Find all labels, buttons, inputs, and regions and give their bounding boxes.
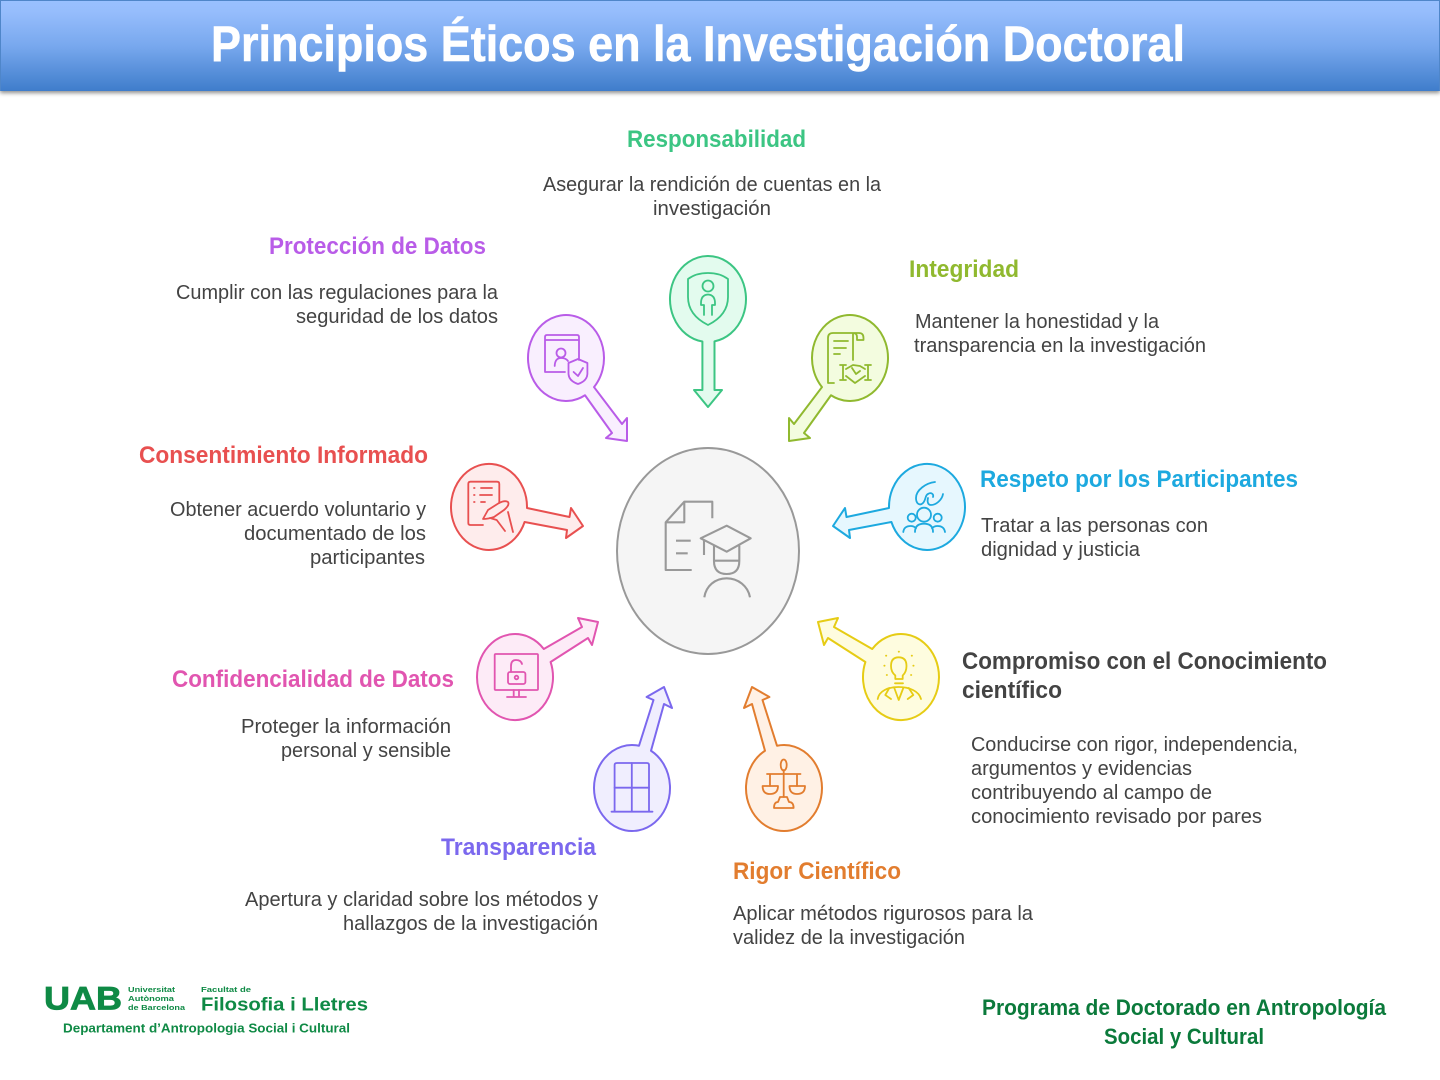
header banner (0, 0, 1440, 91)
description: Protección de Datos: Cumplir con las regulaciones para la (176, 282, 499, 304)
description: Responsabilidad: investigación (653, 198, 771, 220)
icon: scroll and handshake (828, 333, 871, 383)
description: Protección de Datos: seguridad de los datos (296, 306, 498, 328)
description: Confidencialidad de Datos (241, 716, 451, 762)
panel: Consentimiento Informado (139, 442, 583, 569)
arrow node: Consentimiento Informado (451, 464, 583, 550)
description: Rigor Científico: validez de la investigación (733, 927, 965, 949)
heading: Respeto por los Participantes: Respeto por los Participantes (980, 466, 1298, 493)
heading: Integridad: Integridad (909, 256, 1019, 283)
arrow node: Compromiso con el Conocimiento científico (818, 618, 939, 720)
heading: Compromiso con el Conocimiento científico: Compromiso con el Conocimiento (962, 648, 1327, 675)
description: Respeto por los Participantes: Tratar a las personas con (981, 515, 1208, 537)
description: Transparencia: hallazgos de la investigación (343, 913, 598, 935)
description: Compromiso con el Conocimiento científico: Conducirse con rigor, independencia, (971, 734, 1298, 756)
logo: UAB Filosofia i Lletres: Autònoma (128, 994, 175, 1003)
icon: shield with person (688, 273, 728, 325)
description: Compromiso con el Conocimiento científico (971, 734, 1298, 828)
arrow node: Integridad (789, 315, 888, 441)
description: Protección de Datos (176, 282, 499, 328)
arrow node: Confidencialidad de Datos (477, 618, 598, 720)
heading: Protección de Datos: Protección de Datos (269, 233, 486, 260)
description: Confidencialidad de Datos: Proteger la información (241, 716, 451, 738)
description: Rigor Científico: Aplicar métodos rigurosos para la (733, 903, 1034, 925)
icon: people with care symbol (903, 482, 945, 532)
logo: UAB Filosofia i Lletres: UAB (44, 980, 122, 1016)
description: Compromiso con el Conocimiento científico: contribuyendo al campo de (971, 782, 1212, 804)
panel: Integridad (789, 256, 1206, 441)
logo: UAB Filosofia i Lletres: de Barcelona (128, 1003, 186, 1012)
heading: Compromiso con el Conocimiento científico: científico (962, 677, 1062, 704)
heading: Transparencia: Transparencia (441, 834, 596, 861)
logo: UAB Filosofia i Lletres: Departament d’Antropologia Social i Cultural (63, 1022, 350, 1036)
panel: Responsabilidad (543, 126, 882, 407)
icon: window (612, 763, 652, 812)
program name: Social y Cultural (1104, 1024, 1264, 1049)
panel: Transparencia (245, 687, 672, 935)
description: Integridad: Mantener la honestidad y la (915, 311, 1160, 333)
heading: Confidencialidad de Datos: Confidencialidad de Datos (172, 666, 454, 693)
description: Respeto por los Participantes: dignidad y justicia (981, 539, 1141, 561)
description: Respeto por los Participantes (981, 515, 1208, 561)
arrow node: Rigor Científico (744, 687, 822, 831)
description: Confidencialidad de Datos: personal y sensible (281, 740, 451, 762)
title: Principios Éticos en la Investigación Doctoral (211, 16, 1185, 72)
arrow node: Protección de Datos (528, 315, 627, 441)
description: Rigor Científico (733, 903, 1034, 949)
icon: monitor with open padlock (495, 654, 538, 697)
heading: Compromiso con el Conocimiento científico (962, 648, 1327, 704)
description: Compromiso con el Conocimiento científico: argumentos y evidencias (971, 758, 1192, 780)
panel: Protección de Datos (176, 233, 627, 441)
icon: signing a document (468, 482, 513, 532)
logo: UAB Filosofia i Lletres (44, 980, 368, 1036)
panel: Confidencialidad de Datos (172, 618, 598, 762)
heading: Rigor Científico: Rigor Científico (733, 858, 901, 885)
arrow node: Responsabilidad (670, 256, 746, 407)
description: Consentimiento Informado (170, 499, 426, 569)
description: Integridad: transparencia en la investigación (914, 335, 1206, 357)
heading: Consentimiento Informado: Consentimiento Informado (139, 442, 428, 469)
program name: Programa de Doctorado en Antropología (982, 995, 1387, 1020)
arrow node: Respeto por los Participantes (833, 464, 965, 550)
description: Transparencia (245, 889, 598, 935)
icon: balance scale (763, 760, 805, 808)
logo: UAB Filosofia i Lletres: Universitat (128, 985, 176, 994)
icon: document and graduate (666, 502, 751, 597)
description: Consentimiento Informado: documentado de los (244, 523, 426, 545)
description: Consentimiento Informado: participantes (310, 547, 425, 569)
panel: Rigor Científico (733, 687, 1034, 949)
description: Responsabilidad (543, 174, 882, 220)
description: Transparencia: Apertura y claridad sobre los métodos y (245, 889, 598, 911)
description: Responsabilidad: Asegurar la rendición de cuentas en la (543, 174, 882, 196)
description: Integridad (914, 311, 1206, 357)
panel: Respeto por los Participantes (833, 464, 1298, 561)
arrow node: Transparencia (594, 687, 672, 831)
panel: Compromiso con el Conocimiento científico (818, 618, 1327, 828)
description: Consentimiento Informado: Obtener acuerdo voluntario y (170, 499, 426, 521)
program name (982, 995, 1387, 1049)
central node: doctoral research (617, 448, 799, 654)
heading: Responsabilidad: Responsabilidad (627, 126, 806, 153)
icon: profile window with shield (545, 335, 587, 384)
logo: UAB Filosofia i Lletres: Filosofia i Lletres (201, 994, 368, 1014)
logo: UAB Filosofia i Lletres: Facultat de (201, 985, 251, 994)
description: Compromiso con el Conocimiento científico: conocimiento revisado por pares (971, 806, 1262, 828)
icon: person with light bulb (878, 652, 921, 700)
